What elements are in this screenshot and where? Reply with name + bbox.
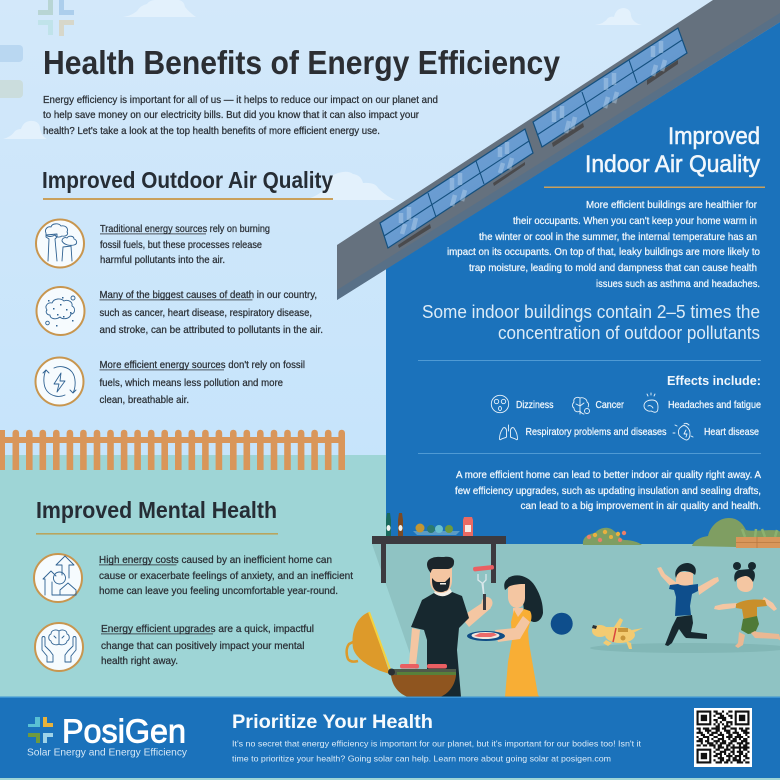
text: traditional sources: Traditional energy sources rely on burning	[100, 223, 270, 235]
intro text: Energy efficiency is important for all of us — it helps to reduce our impact on our planet and	[43, 94, 438, 106]
text: efficient upgrades: health right away.	[101, 655, 178, 667]
text: efficient sources: clean, breathable air.	[100, 394, 189, 406]
text: efficient sources: fuels, which means less pollution and more	[100, 377, 283, 389]
effect: heart disease	[673, 423, 759, 440]
text: energy costs: High energy costs caused by an inefficient home can	[99, 554, 332, 566]
text: indoor paragraph: issues such as asthma and headaches.	[596, 278, 760, 290]
panel: footer	[0, 696, 780, 780]
text: efficient upgrades	[101, 623, 314, 667]
effect: headaches: Headaches and fatigue	[668, 399, 761, 411]
logo: Solar Energy and Energy Efficiency	[27, 747, 188, 759]
heading: effects include: Effects include:	[667, 373, 761, 388]
text: traditional sources: fossil fuels, but these processes release	[100, 239, 262, 251]
icon: pollution particles	[36, 287, 84, 335]
heading: indoor air quality: Indoor Air Quality	[585, 151, 760, 178]
intro text	[43, 94, 438, 137]
icon: renewable energy	[36, 358, 84, 406]
text: efficient home: can lead to a big improvement in air quality and health.	[520, 500, 761, 512]
text: indoor paragraph: the winter or cool in the summer, the internal temperature has an	[479, 231, 757, 243]
text: causes of death	[100, 289, 323, 336]
ground shadow	[590, 643, 780, 653]
effect: cancer: Cancer	[596, 399, 624, 411]
title: Health Benefits of Energy Efficiency	[43, 44, 561, 81]
footer text: It's no secret that energy efficiency is important for our planet, but it's important for our bodies too! Isn't it	[232, 739, 642, 749]
logo	[27, 712, 188, 759]
text: energy costs: cause or exacerbate feelings of anxiety, and an inefficient	[99, 570, 353, 582]
effect: respiratory	[500, 425, 666, 440]
text: indoor paragraph	[447, 199, 760, 290]
panel: indoor air quality	[418, 123, 765, 512]
figure: boy	[657, 563, 719, 646]
intro text: health? Let's take a look at the top health benefits of more efficient energy use.	[43, 125, 380, 137]
ball	[551, 613, 573, 635]
effect: heart disease: Heart disease	[704, 426, 759, 438]
text: efficient upgrades: Energy efficient upgrades are a quick, impactful	[101, 623, 314, 635]
figure: man	[409, 557, 494, 697]
text: causes of death: such as cancer, heart disease, respiratory disease,	[100, 307, 312, 319]
intro text: to help save money on our electricity bills. But did you know that it can also impact your	[43, 109, 419, 121]
ground	[0, 455, 780, 697]
panel: mental health	[34, 497, 353, 671]
clouds	[3, 0, 642, 200]
text: efficient sources: More efficient energy sources don't rely on fossil	[100, 359, 305, 371]
fence	[0, 430, 345, 470]
flower bush	[583, 528, 642, 545]
garden planter	[692, 518, 780, 548]
text: indoor paragraph: impact on its occupants. On top of that, leaky buildings are more likely to	[447, 246, 760, 258]
effect: dizziness	[491, 395, 554, 413]
faded side tabs	[0, 45, 23, 98]
faded logo mark	[38, 0, 74, 36]
panel: outdoor air quality	[36, 167, 333, 406]
building shadow ground	[372, 544, 780, 697]
text: traditional sources: harmful pollutants into the air.	[100, 254, 225, 266]
icon: smokestacks	[36, 220, 84, 268]
footer heading: Prioritize Your Health	[232, 712, 433, 733]
text: efficient home: few efficiency upgrades, such as updating insulation and sealing drafts,	[455, 485, 761, 497]
callout: pollutants	[422, 302, 760, 343]
text: efficient upgrades: change that can positively impact your mental	[101, 640, 304, 652]
text: causes of death: Many of the biggest causes of death in our country,	[100, 289, 317, 301]
effect: dizziness: Dizziness	[516, 399, 554, 411]
text: indoor paragraph: trap moisture, leading to mold and dampness that can cause health	[469, 262, 757, 274]
text: indoor paragraph: their occupants. When you can't keep your home warm in	[513, 215, 757, 227]
text: causes of death: and stroke, can be attributed to pollutants in the air.	[100, 324, 323, 336]
heading: mental health: Improved Mental Health	[36, 497, 277, 523]
footer text	[232, 739, 642, 764]
heading: outdoor air quality: Improved Outdoor Air Quality	[42, 167, 333, 193]
text: traditional sources	[100, 223, 270, 266]
text: energy costs	[99, 554, 353, 597]
callout: pollutants: Some indoor buildings contain 2–5 times the	[422, 302, 760, 322]
text: energy costs: home can leave you feeling uncomfortable year-round.	[99, 585, 338, 597]
sky background	[0, 0, 780, 470]
icon: energy costs	[34, 554, 82, 602]
effect: respiratory: Respiratory problems and diseases	[526, 426, 666, 438]
figure: dog	[592, 618, 643, 649]
figure: girl	[714, 562, 780, 648]
figure: woman with plate	[467, 575, 543, 697]
text: efficient home: A more efficient home can lead to better indoor air quality right away. A	[456, 469, 761, 481]
QR code	[694, 708, 752, 767]
logo: PosiGen	[62, 712, 186, 750]
panel: building wall	[386, 22, 780, 544]
text: efficient sources	[100, 359, 305, 406]
roof	[337, 0, 780, 300]
text: indoor paragraph: More efficient buildings are healthier for	[586, 199, 757, 211]
icon: grill	[347, 612, 456, 697]
callout: pollutants: concentration of outdoor pollutants	[498, 323, 760, 343]
heading: indoor air quality	[585, 123, 760, 178]
footer text: time to prioritize your health? Going solar can help. Learn more about going solar at posigen.com	[232, 754, 611, 764]
icon: brain in hands	[35, 623, 83, 671]
heading: indoor air quality: Improved	[668, 123, 760, 150]
effect: headaches	[644, 393, 761, 412]
solar panels	[380, 28, 687, 248]
effect: cancer	[572, 397, 624, 414]
text: efficient home	[455, 469, 761, 512]
shelf table with bottles	[372, 513, 506, 583]
